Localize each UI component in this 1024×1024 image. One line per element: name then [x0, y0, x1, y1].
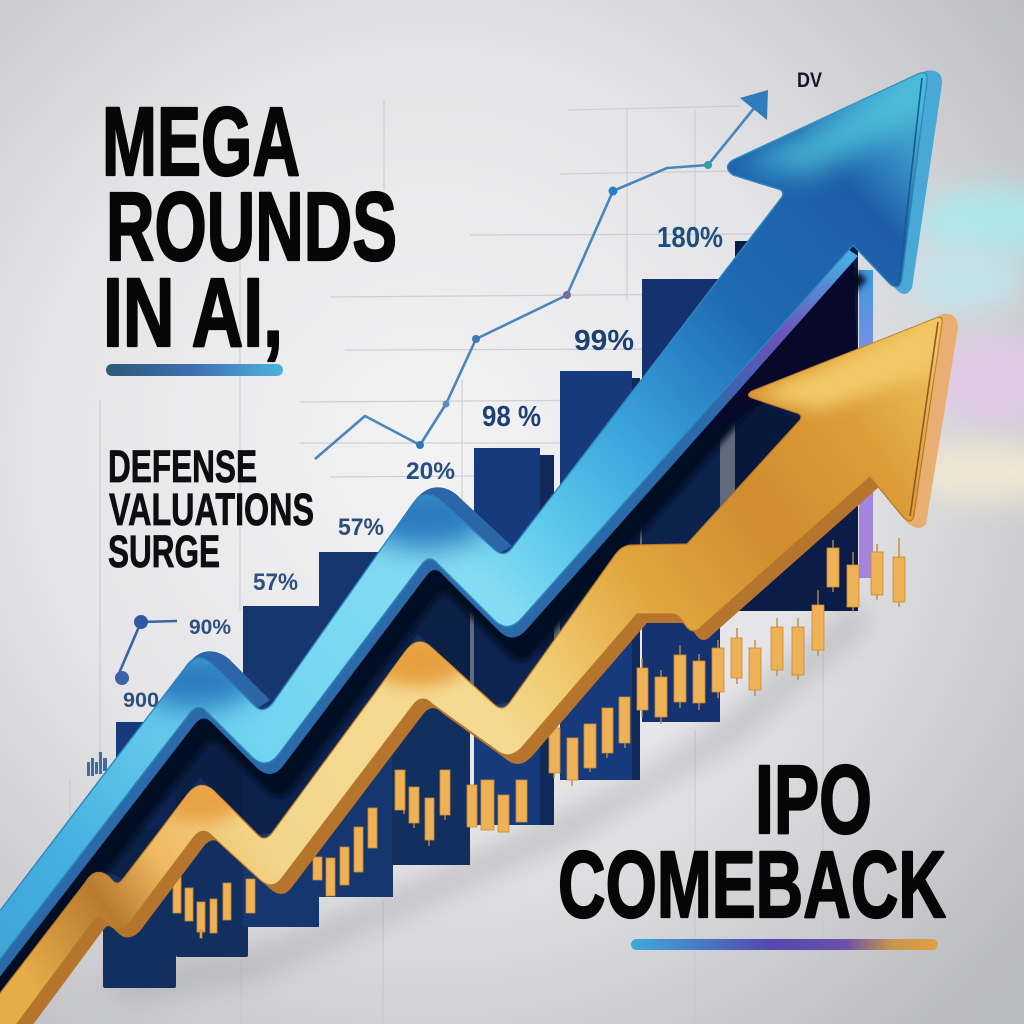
- percentage labels: 98 %: [482, 401, 541, 433]
- percentage labels: DV: [797, 69, 822, 92]
- IPO underline: [631, 939, 938, 950]
- small line chart: [115, 615, 177, 685]
- percentage labels: 57%: [338, 514, 384, 541]
- dark shadow between arrows: [0, 231, 867, 1019]
- subheading: Defense valuations surge: VALUATIONS: [109, 484, 314, 535]
- candlesticks: [173, 538, 905, 938]
- bar chart: navy stair-step bars: [103, 241, 873, 988]
- gold arrow: [0, 314, 958, 1024]
- percentage labels: 180%: [657, 222, 723, 254]
- gold arrow head extrusion: [870, 314, 958, 528]
- percentage labels: 57%: [253, 569, 298, 596]
- percentage labels: 20%: [406, 458, 455, 485]
- heading: IPO comeback: IPO: [755, 745, 872, 854]
- title: Mega Rounds in AI: [102, 87, 397, 367]
- percentage labels: [123, 69, 822, 712]
- shadow under bars: [110, 600, 868, 1000]
- subheading: Defense valuations surge: [108, 441, 314, 577]
- small bar icon: [87, 752, 107, 776]
- percentage labels: 99%: [574, 325, 634, 357]
- percentage labels: 900: [123, 689, 159, 712]
- title: Mega Rounds in AI: MEGA: [102, 87, 300, 196]
- blue arrow lower bevel: [0, 208, 858, 996]
- title: Mega Rounds in AI: IN AI,: [103, 258, 283, 367]
- blue arrow head extrusion: [853, 71, 942, 294]
- rainbow glow behind arrow heads: [905, 186, 1024, 502]
- blue arrow peak bevels: [188, 487, 512, 708]
- line chart with arrow: [315, 90, 768, 459]
- title underline: [106, 364, 283, 376]
- subheading: Defense valuations surge: DEFENSE: [108, 441, 257, 492]
- gold arrow lower bevel: [0, 429, 880, 1024]
- subheading: Defense valuations surge: SURGE: [108, 526, 220, 577]
- percentage labels: 90%: [189, 616, 231, 639]
- title: Mega Rounds in AI: ROUNDS: [106, 172, 397, 281]
- gold arrow face: [0, 317, 942, 1024]
- heading: IPO comeback: [558, 745, 946, 938]
